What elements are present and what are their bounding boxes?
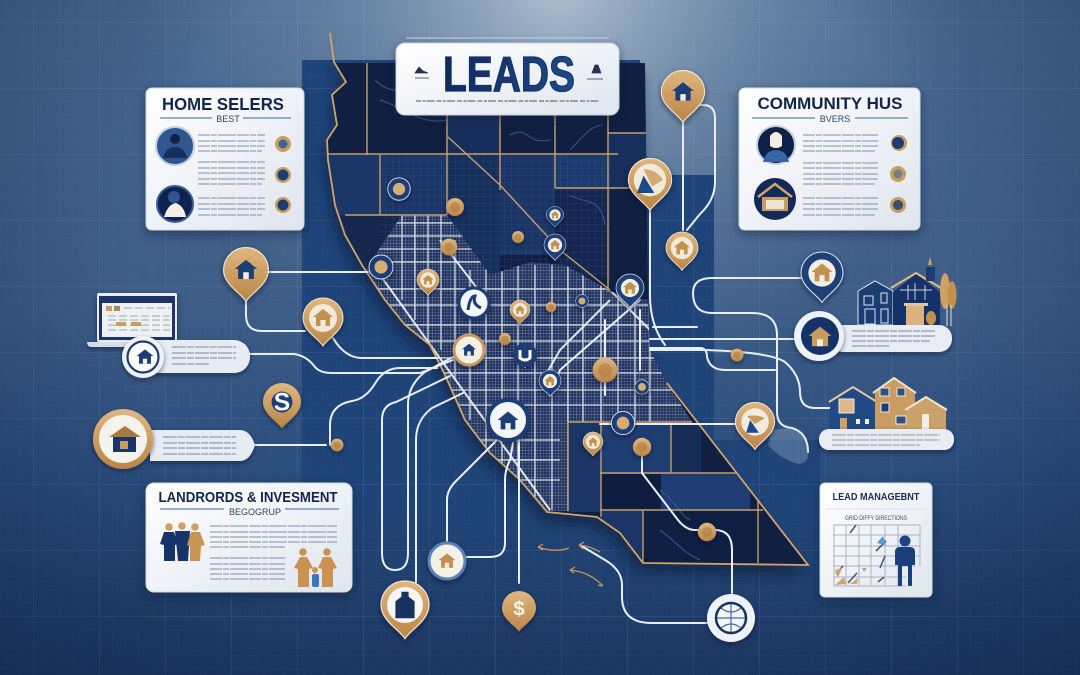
heading: lead management: LEAD MANAGEBNT <box>832 492 920 503</box>
panel: lead management <box>820 483 932 597</box>
pin: navy house <box>801 252 843 302</box>
pin: small house <box>666 232 698 270</box>
connector lines <box>246 105 832 623</box>
text lines <box>198 135 265 215</box>
icon: house circle <box>794 311 844 361</box>
pin: dollar: S <box>274 390 290 417</box>
small icons <box>275 136 291 213</box>
callout: gold house pill <box>93 409 255 469</box>
text lines <box>803 135 878 215</box>
avatar: buyer <box>757 126 795 164</box>
title: LEADS <box>443 48 575 102</box>
illustration: navy houses <box>858 257 956 326</box>
bay arrows <box>538 542 603 586</box>
pin: cream with navy icon <box>628 158 672 210</box>
pin: bottom dollar: $ <box>513 599 525 621</box>
icon: three people <box>160 522 205 561</box>
title card <box>396 38 619 115</box>
avatar: woman <box>157 186 193 222</box>
panel: home sellers <box>146 88 304 230</box>
panel: landlords <box>146 483 352 592</box>
lake shape <box>768 428 808 464</box>
pin: gold house <box>303 298 343 346</box>
icon: person <box>895 536 915 586</box>
pin: bottom dollar <box>502 591 536 632</box>
pin: dollar <box>263 383 301 429</box>
avatar: home <box>754 178 796 220</box>
illustration: tan houses <box>829 378 947 429</box>
callout: right house pill <box>794 311 952 361</box>
circle: house blue ring <box>429 543 465 579</box>
callout: home pill <box>122 336 250 378</box>
icon: navy house <box>122 336 164 378</box>
heading: home sellers: HOME SELERS <box>162 94 284 114</box>
panel: lead management: GRID DIFFY DIRECTIONS <box>845 516 907 522</box>
small icons <box>890 135 907 213</box>
pin: left house <box>224 248 268 301</box>
panel: community hub <box>739 88 920 230</box>
icon: family <box>294 548 337 587</box>
heading: community hub: COMMUNITY HUS <box>758 95 902 113</box>
icon: gold ring house <box>93 409 153 469</box>
panel: home sellers: BEST <box>216 114 240 124</box>
panel: landlords: BEGOGRUP <box>229 507 281 517</box>
calendar grid <box>833 525 920 586</box>
city map <box>320 30 820 575</box>
heading: landlords: LANDRORDS & INVESMENT <box>158 489 338 506</box>
map pins <box>331 178 743 541</box>
pin: top right house <box>661 70 705 122</box>
avatar: man <box>156 127 194 165</box>
panel: community hub: BVERS <box>820 114 850 124</box>
text lines <box>210 526 337 579</box>
circle: globe node <box>707 594 755 642</box>
pin: right lower <box>735 402 775 449</box>
laptop <box>87 293 177 347</box>
callout: lower right pill <box>819 429 954 450</box>
pin: bottom apron <box>381 581 429 639</box>
